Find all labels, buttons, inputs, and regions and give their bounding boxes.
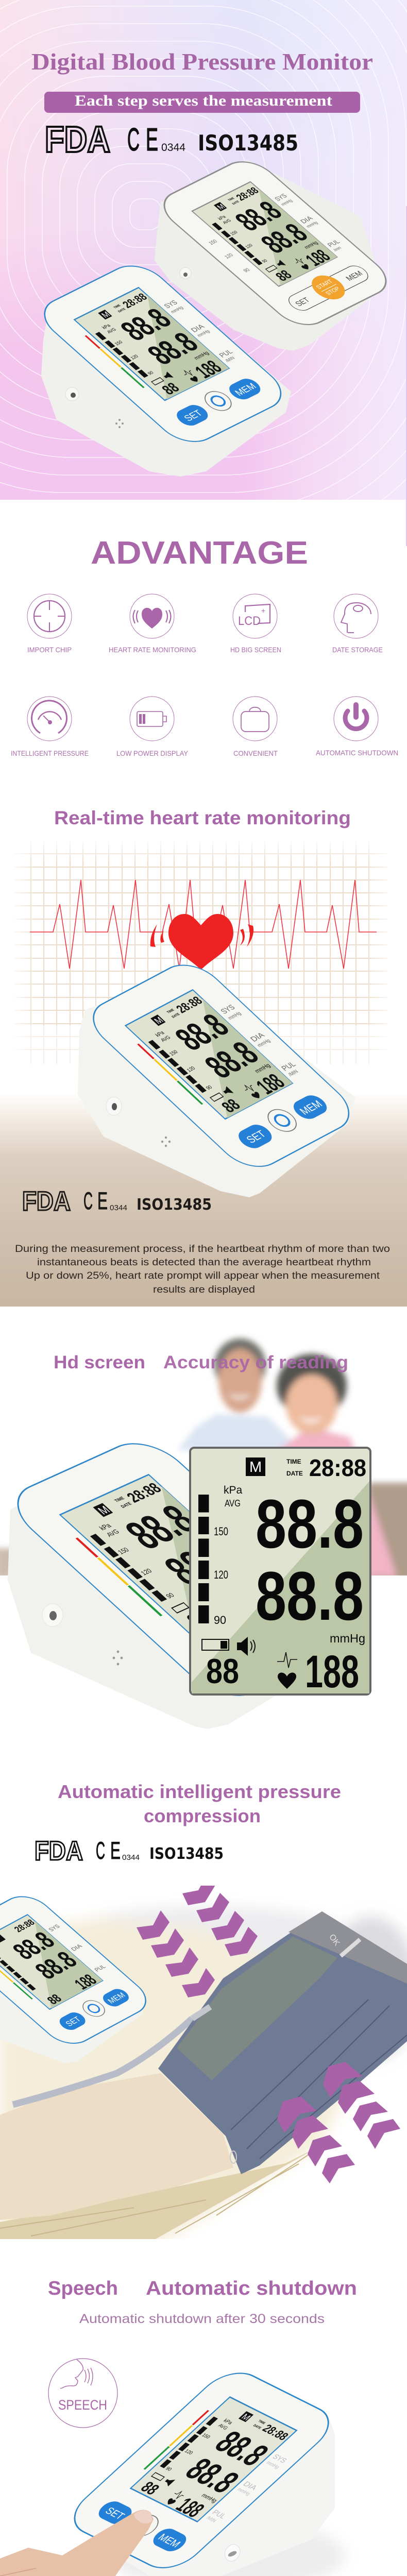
device: speech section monitor: 120 [183, 2448, 194, 2456]
device: gray monitor: 188 [301, 246, 335, 269]
device: gray monitor [152, 155, 398, 351]
device: blue monitor: /MIN [224, 355, 236, 363]
text block: heart rate explanation: During the measurement process, if the heartbeat rhythm of more than two [15, 1244, 390, 1255]
icon: HD big screen [233, 594, 277, 638]
device: heart rate section monitor: 120 [186, 1065, 197, 1073]
device: HD section monitor: 150 [116, 1546, 131, 1556]
certification logos: heart rate section: E [97, 1187, 108, 1214]
heading: HD screen: Hd screen [54, 1352, 145, 1372]
device: gray monitor: SYS [273, 192, 289, 202]
title: Digital Blood Pressure Monitor [31, 48, 373, 75]
icon: speech badge [48, 2359, 117, 2428]
certification logos: hero: C [127, 122, 140, 158]
device: HD section monitor: 88.8 [114, 1497, 208, 1558]
device: blue monitor: SYS [162, 299, 179, 310]
label: CONVENIENT [233, 749, 278, 757]
device: cuff scene monitor: PUL [93, 1964, 107, 1973]
heading: HD screen [54, 1352, 348, 1372]
device: HD section monitor: kPa [97, 1521, 113, 1532]
device: gray monitor: SET [294, 296, 312, 308]
certification logos: hero: ISO13485 [198, 130, 298, 156]
device: HD section monitor: 88 [181, 1606, 216, 1632]
subtitle pill [44, 92, 360, 113]
device: blue monitor: 28:88 [120, 292, 150, 310]
device: gray monitor: M [215, 203, 227, 211]
icon: automatic shutdown [334, 697, 378, 741]
icon: import chip [27, 594, 72, 638]
device: gray monitor: /min [332, 246, 343, 252]
heading: real-time heart rate monitoring: Real-time heart rate monitoring [54, 807, 351, 828]
device: speech section monitor: 28:88 [260, 2422, 291, 2443]
device: blue monitor: 88.8 [113, 302, 179, 347]
device: speech section monitor: 88 [137, 2479, 163, 2498]
panel: blurred couple photo [0, 1338, 407, 1581]
device: speech section monitor: DATE [252, 2424, 262, 2430]
cuff: OK [327, 1933, 342, 1947]
panel: enlarged LCD display: kPa [224, 1484, 243, 1496]
device: gray monitor: START [315, 279, 334, 291]
device: gray monitor: 150 [229, 230, 239, 236]
device: gray monitor: 88 [272, 267, 295, 284]
device: gray monitor: 88.8 [253, 218, 315, 259]
device: HD section monitor: 90 [164, 1591, 176, 1600]
certification logos: heart rate section: ISO13485 [137, 1196, 212, 1214]
device: blue monitor: mmHg [193, 350, 211, 361]
panel: enlarged LCD display: M [249, 1459, 262, 1476]
device: blue monitor: kPa [100, 323, 112, 330]
arrows: pressure chevrons pointing in [137, 1876, 258, 1997]
device: gray monitor: mmHg [280, 198, 294, 207]
icon: low power display [130, 697, 174, 741]
panel: hero banner [0, 0, 407, 500]
device: heart rate section monitor: PUL [280, 1060, 298, 1073]
device: speech section monitor: mmHg [200, 2493, 218, 2504]
device: gray monitor: 120 [244, 243, 254, 249]
device: HD section monitor [8, 1443, 275, 1729]
device: heart rate section monitor: SET [244, 1129, 268, 1145]
device: blue monitor: PUL [217, 348, 234, 359]
device: speech section monitor: 188 [171, 2494, 210, 2521]
device: blue monitor: 120 [129, 353, 140, 361]
device: heart rate section monitor: DATE [171, 1012, 181, 1019]
device: cuff scene monitor: MEM [106, 1991, 128, 2005]
device: speech section monitor: 88.8 [207, 2424, 277, 2472]
device: blue monitor: SET [181, 408, 205, 423]
device: blue monitor [32, 258, 294, 477]
backdrop: grey haze [0, 1906, 407, 2246]
panel: enlarged LCD display: 28:88 [309, 1454, 366, 1481]
certification logos: heart rate section: 0344 [110, 1204, 127, 1212]
device: speech section monitor: DIA [241, 2480, 260, 2492]
device: cuff scene monitor: 188 [71, 1971, 100, 1993]
arm [0, 2073, 233, 2220]
certification logos: hero: FDA [45, 120, 110, 160]
device: cuff scene monitor: 28:88 [12, 1918, 37, 1934]
device: heart rate section monitor: 88.8 [197, 1035, 267, 1086]
text block: heart rate explanation: Up or down 25%, heart rate prompt will appear when the measurement [26, 1270, 380, 1281]
device: blue monitor: 150 [113, 340, 124, 346]
certification logos: heart rate section [22, 1187, 212, 1216]
device: heart rate section monitor: SYS [219, 1004, 237, 1016]
certification logos: pressure section: FDA [35, 1836, 83, 1866]
panel: enlarged LCD display [190, 1448, 370, 1697]
heading: automatic intelligent pressure compression: Automatic intelligent pressure [58, 1781, 341, 1802]
device: heart rate section monitor: 28:88 [173, 994, 206, 1015]
device: gray monitor: 150 [208, 239, 219, 246]
device: heart rate section monitor: mmHg [253, 1062, 272, 1075]
label: HD BIG SCREEN [230, 646, 281, 654]
label: HEART RATE MONITORING [109, 646, 196, 654]
device: cuff scene monitor: 88.8 [29, 1946, 83, 1984]
device: blue monitor: TIME [113, 304, 122, 309]
device: speech section monitor: 90 [164, 2466, 173, 2472]
device: speech section monitor: SET [103, 2505, 127, 2522]
subheading: Automatic shutdown after 30 seconds [79, 2312, 325, 2326]
certification logos: hero [45, 120, 298, 160]
certification logos: hero: E [146, 122, 158, 158]
label: AUTOMATIC SHUTDOWN [316, 749, 398, 757]
device: heart rate section monitor: mmHg [256, 1038, 272, 1048]
device: cuff scene monitor: 88.8 [6, 1927, 61, 1964]
heading: automatic intelligent pressure compression [58, 1781, 341, 1826]
device: speech section monitor: /MIN [205, 2515, 217, 2523]
icon: HD big screen: + [261, 606, 265, 615]
certification logos: pressure section: ISO13485 [149, 1845, 224, 1863]
device: heart rate section monitor: 90 [205, 1084, 214, 1091]
text block: heart rate explanation: instantaneous beats is detected than the average heartbeat rhythm [37, 1257, 371, 1268]
label: INTELLIGENT PRESSURE [11, 749, 89, 757]
device: blue monitor: mmHg [169, 305, 184, 314]
panel: enlarged LCD display: mmHg [330, 1632, 365, 1645]
device: blue monitor: DATE [117, 308, 127, 313]
device: heart rate section monitor: mmHg [227, 1011, 243, 1021]
device: heart rate section monitor: AVG [160, 1035, 172, 1043]
device: gray monitor: AVG [222, 218, 232, 225]
certification logos: pressure section: 0344 [122, 1853, 140, 1862]
text block: heart rate explanation: results are displayed [153, 1284, 255, 1295]
label: IMPORT CHIP [27, 646, 72, 654]
cuff [158, 1911, 407, 2174]
device: HD section monitor: 88.8 [154, 1532, 247, 1594]
device: heart rate section monitor: kPa [154, 1030, 166, 1038]
chart: ECG waveform [30, 880, 377, 969]
device: cuff scene monitor [0, 1890, 156, 2063]
heading: speech and automatic shutdown: Speech [48, 2278, 118, 2299]
panel: enlarged LCD display: 188 [305, 1646, 359, 1697]
heading: speech and automatic shutdown: Automatic shutdown [146, 2278, 357, 2299]
panel: enlarged LCD display: 88 [206, 1652, 239, 1691]
certification logos: hero: 0344 [161, 142, 185, 154]
panel: enlarged LCD display: TIME [286, 1458, 301, 1465]
device: blue monitor: MEM [232, 381, 259, 398]
subtitle pill: Each step serves the measurement [75, 92, 332, 109]
device: heart rate section monitor: MEM [297, 1098, 325, 1117]
device: gray monitor: 90 [261, 258, 268, 264]
device: speech section monitor: TIME [257, 2419, 266, 2426]
device: speech section monitor: 88.8 [177, 2451, 247, 2500]
icon: speech badge: SPEECH [58, 2397, 107, 2413]
certification logos: pressure section: C [96, 1837, 105, 1864]
device: gray monitor: 28:88 [233, 185, 262, 203]
icon: red heart [150, 914, 253, 970]
device: heart rate section monitor: DIA [249, 1031, 267, 1044]
device: cuff scene monitor: DIA [70, 1943, 84, 1953]
device: blue monitor: M [100, 311, 112, 319]
device: gray monitor: 88.8 [228, 195, 289, 236]
panel: enlarged LCD display: AVG [225, 1498, 241, 1509]
device: blue monitor: 188 [191, 357, 227, 382]
device: heart rate section monitor: M [151, 1015, 166, 1026]
certification logos: pressure section: E [110, 1837, 121, 1864]
device: speech section monitor [61, 2365, 345, 2576]
device: HD section monitor: M [95, 1504, 113, 1517]
icon: convenient [233, 697, 277, 741]
device: gray monitor: DIA [299, 214, 315, 225]
panel: cuff photo scene [0, 1876, 407, 2246]
hand pressing button [0, 2510, 154, 2576]
device: gray monitor: kPa [216, 214, 227, 221]
device: gray monitor: 90 [242, 267, 251, 274]
device: blue monitor: 88.8 [140, 327, 206, 370]
heading: speech and automatic shutdown [48, 2278, 357, 2299]
device: heart rate section monitor: TIME [166, 1008, 176, 1014]
device: heart rate section monitor [78, 956, 362, 1197]
device: heart rate section monitor: 88 [217, 1095, 244, 1116]
device: cuff scene monitor: SET [64, 2015, 83, 2028]
certification logos: heart rate section: C [83, 1187, 93, 1214]
cuff tube [13, 2019, 192, 2105]
device: cuff scene monitor: 88 [44, 1992, 65, 2007]
device: gray monitor: STOP [325, 286, 342, 297]
heading: advantage: ADVANTAGE [91, 535, 308, 571]
certification logos: heart rate section: FDA [22, 1187, 71, 1216]
device: HD section monitor: TIME [113, 1496, 126, 1503]
device: gray monitor: TIME [228, 197, 235, 202]
device: blue monitor: AVG [106, 327, 117, 334]
device: heart rate section monitor: 88.8 [167, 1007, 238, 1058]
panel: enlarged LCD display: 88.8 [256, 1558, 364, 1635]
desk: wood surface [0, 2146, 319, 2239]
device: blue monitor: 88 [158, 380, 183, 398]
device: heart rate section monitor: /MIN [287, 1069, 300, 1078]
device: speech section monitor: M [239, 2412, 253, 2422]
panel: enlarged LCD display: 120 [214, 1568, 228, 1581]
device: speech section monitor: AVG [216, 2423, 229, 2431]
device: speech section monitor: SYS [271, 2452, 289, 2464]
arrows: pressure chevrons pointing out [277, 2062, 400, 2183]
device: cuff scene monitor: SYS [47, 1924, 61, 1933]
label: DATE STORAGE [332, 646, 383, 654]
heading: HD screen: Accuracy of reading [163, 1352, 348, 1372]
device: speech section monitor: MEM [155, 2532, 183, 2550]
panel: enlarged LCD display: 90 [214, 1614, 226, 1626]
device: gray monitor: mmHg [306, 221, 319, 229]
label: LOW POWER DISPLAY [116, 749, 189, 757]
icon: intelligent pressure [27, 697, 72, 741]
device: HD section monitor: 28:88 [123, 1480, 165, 1506]
device: gray monitor: MEM [344, 270, 365, 283]
device: HD section monitor: 120 [139, 1567, 154, 1577]
panel: enlarged LCD display: DATE [286, 1470, 303, 1477]
device: speech section monitor: kPa [222, 2418, 233, 2426]
device: blue monitor: DIA [189, 323, 206, 334]
device: HD section monitor: DATE [120, 1501, 133, 1509]
icon: date storage [334, 594, 378, 638]
device: gray monitor: mmHg [303, 240, 319, 250]
device: speech section monitor: PUL [210, 2508, 228, 2520]
device: gray monitor: PUL [326, 238, 342, 248]
icon: heart rate monitoring [130, 594, 174, 638]
device: gray monitor: DATE [232, 200, 241, 206]
icon: HD big screen: LCD [238, 614, 261, 628]
device: speech section monitor: 150 [200, 2432, 211, 2440]
device: HD section monitor: AVG [105, 1528, 121, 1538]
device: heart rate section monitor: 150 [168, 1049, 180, 1057]
panel: heart rate section background [0, 837, 407, 1307]
panel: enlarged LCD display: 150 [214, 1525, 228, 1538]
device: blue monitor: 90 [146, 370, 155, 376]
device: heart rate section monitor: 188 [251, 1070, 291, 1099]
panel: enlarged LCD display: 88.8 [256, 1486, 364, 1563]
device: speech section monitor: mmHg [236, 2487, 251, 2497]
device: blue monitor: mmHg [196, 329, 211, 338]
heading: automatic intelligent pressure compression: compression [144, 1805, 261, 1826]
certification logos: pressure section [35, 1836, 224, 1866]
device: gray monitor: 120 [224, 252, 235, 260]
text block: heart rate explanation [15, 1244, 390, 1295]
device: speech section monitor: mmHg [265, 2460, 281, 2470]
